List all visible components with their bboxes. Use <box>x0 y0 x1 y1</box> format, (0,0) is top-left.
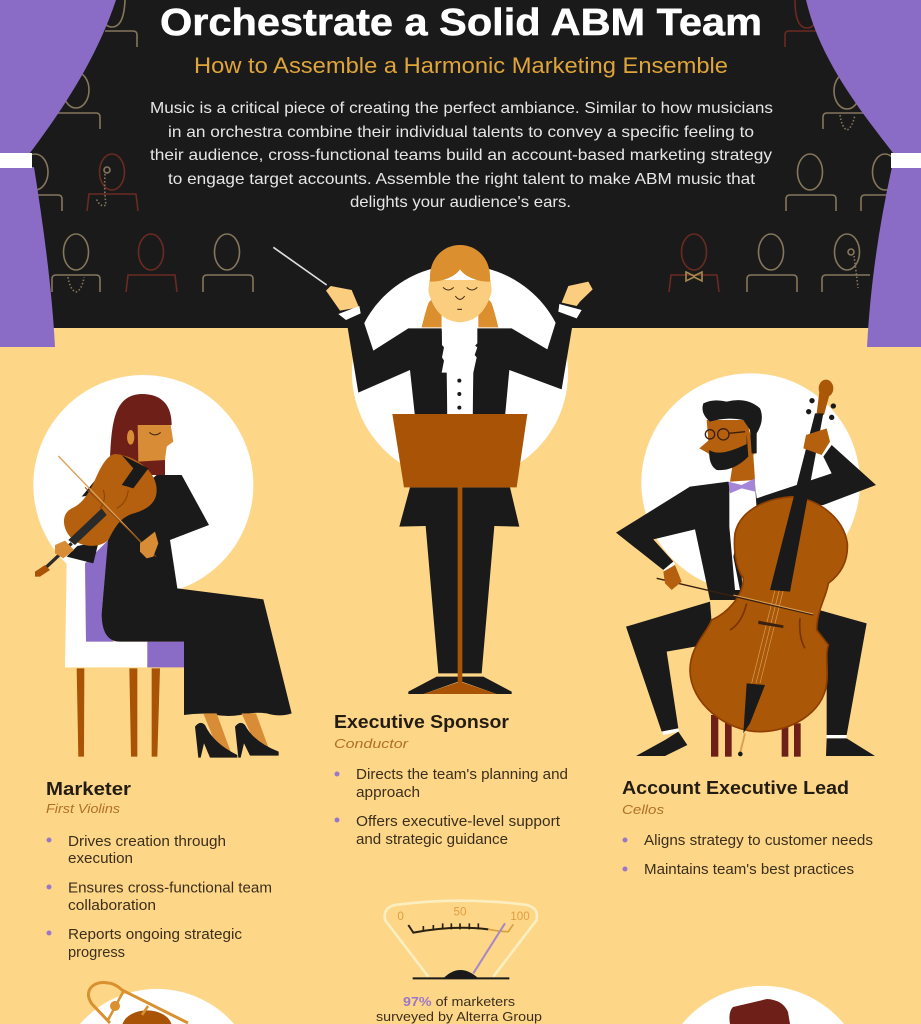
executive sponsor bullets: and strategic guidance <box>356 832 508 848</box>
intro paragraph: delights your audience's ears. <box>350 194 571 211</box>
gauge caption: surveyed by Alterra Group <box>376 1009 542 1024</box>
intro paragraph <box>150 100 773 211</box>
intro paragraph: to engage target accounts. Assemble the right talent to make ABM music that <box>168 171 756 188</box>
marketer bullets: progress <box>68 945 125 961</box>
cellist illustration <box>616 373 876 757</box>
executive sponsor bullets <box>334 767 568 848</box>
stage backdrop <box>0 0 921 328</box>
gauge: 97 percent: 50 <box>454 905 467 918</box>
violinist illustration <box>33 375 292 758</box>
account executive heading: Account Executive Lead <box>622 777 849 798</box>
gauge caption <box>376 994 542 1024</box>
intro paragraph: Music is a critical piece of creating the perfect ambiance. Similar to how musicians <box>150 100 773 117</box>
marketer bullets: execution <box>68 851 133 867</box>
title: Orchestrate a Solid ABM Team <box>160 2 762 44</box>
right curtain <box>806 0 921 347</box>
audience silhouettes <box>22 0 898 292</box>
panel: marketer <box>46 778 272 961</box>
bottom right musician illustration <box>682 986 844 1024</box>
marketer bullets <box>46 834 272 961</box>
panel: executive sponsor <box>334 711 568 848</box>
executive sponsor heading: Executive Sponsor <box>334 711 509 732</box>
marketer heading: Marketer <box>46 778 131 799</box>
executive sponsor bullets: Offers executive-level support <box>356 814 560 830</box>
marketer role: First Violins <box>46 801 121 816</box>
gauge: 97 percent: 0 <box>397 910 404 923</box>
marketer bullets: Ensures cross-functional team <box>68 880 272 896</box>
intro paragraph: in an orchestra combine their individual talents to convey a specific feeling to <box>168 124 754 141</box>
intro paragraph: their audience, cross-functional teams build an account-based marketing strategy <box>150 147 772 164</box>
account executive bullets <box>622 833 873 878</box>
marketer bullets: Drives creation through <box>68 834 226 850</box>
subtitle: How to Assemble a Harmonic Marketing Ensemble <box>194 53 728 78</box>
account executive role: Cellos <box>622 802 665 817</box>
marketer bullets: collaboration <box>68 898 156 914</box>
left curtain <box>0 0 116 347</box>
gauge: 97 percent <box>385 901 537 978</box>
executive sponsor role: Conductor <box>334 736 409 751</box>
conductor illustration <box>273 245 593 694</box>
gauge caption: 97% of marketers <box>403 994 516 1009</box>
gauge: 97 percent: 100 <box>510 910 530 923</box>
marketer bullets: Reports ongoing strategic <box>68 927 242 943</box>
trombone player illustration <box>80 982 234 1024</box>
account executive bullets: Aligns strategy to customer needs <box>644 833 873 849</box>
panel: account executive lead <box>622 777 873 878</box>
executive sponsor bullets: approach <box>356 785 420 801</box>
executive sponsor bullets: Directs the team's planning and <box>356 767 568 783</box>
account executive bullets: Maintains team's best practices <box>644 862 854 878</box>
